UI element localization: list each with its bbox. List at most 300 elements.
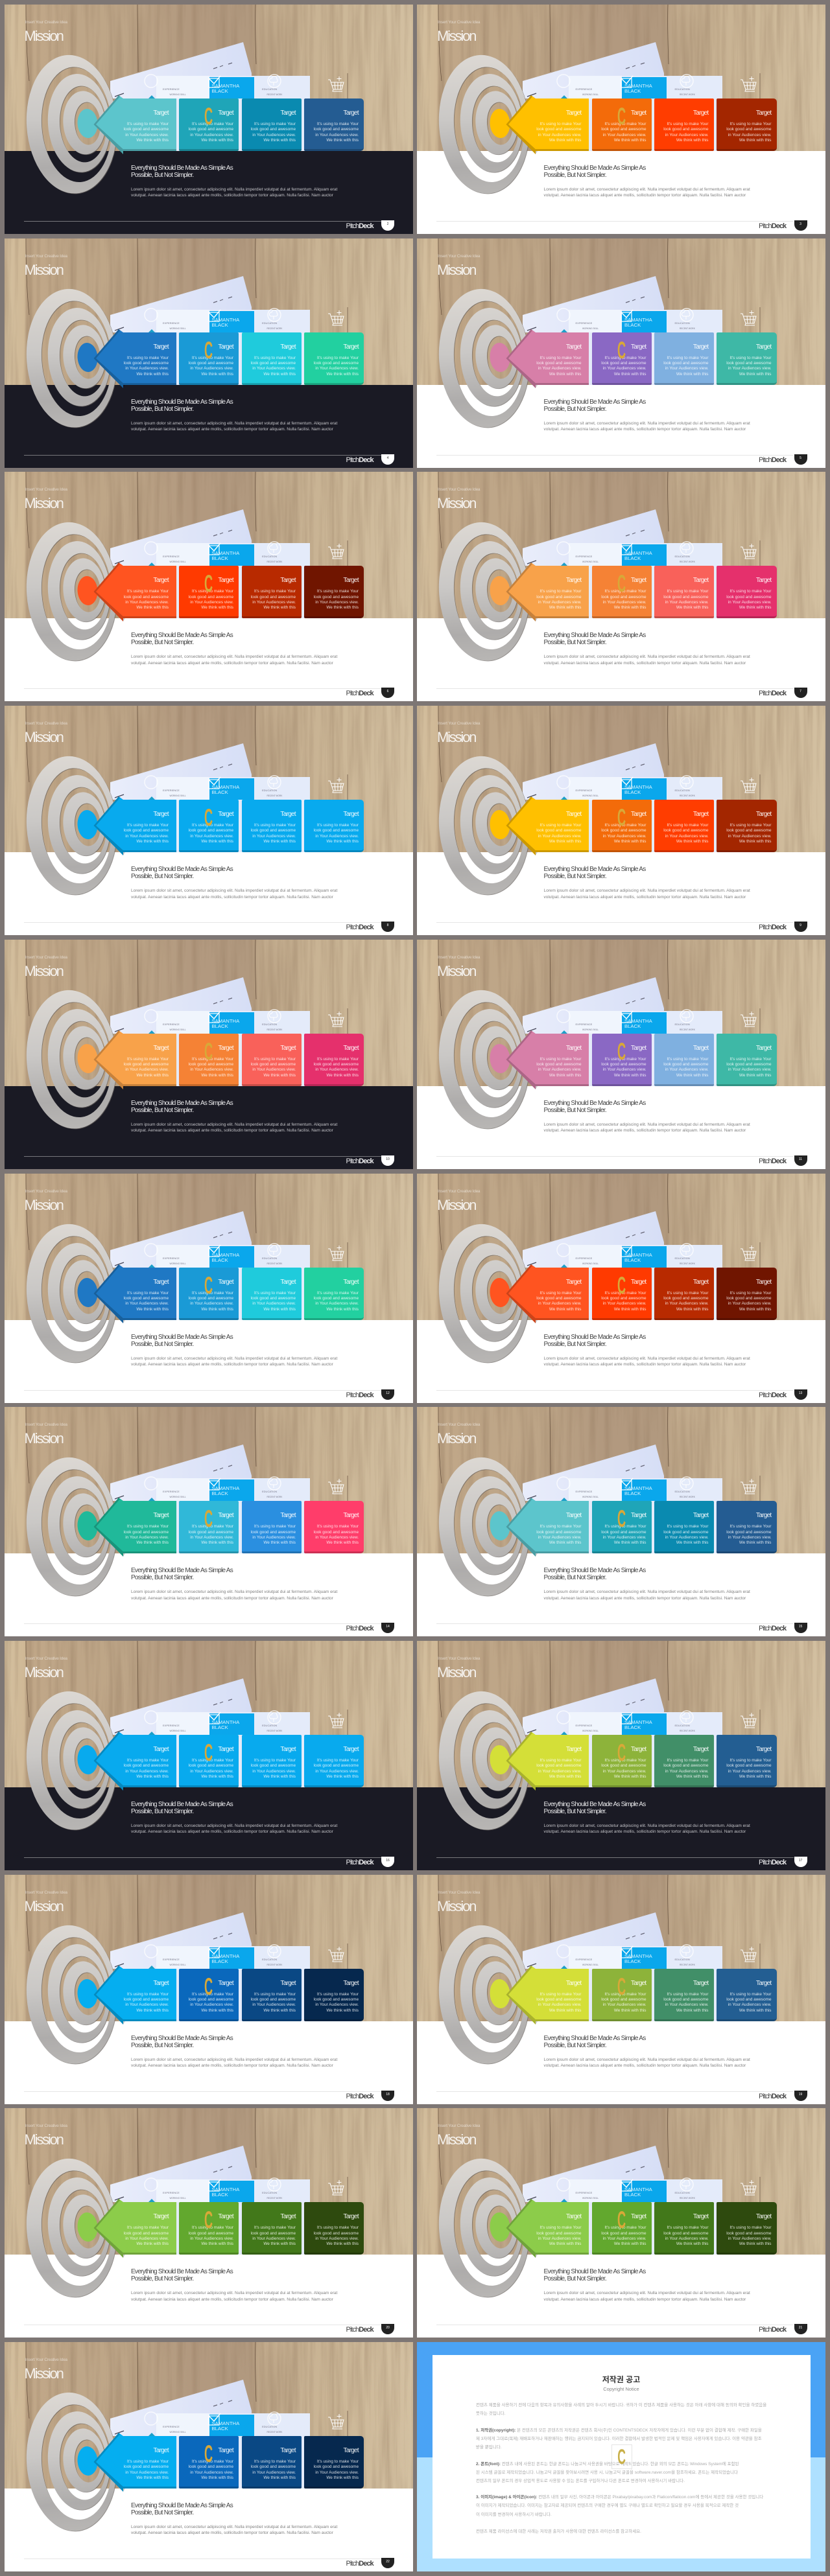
card 1: It's using to make Your	[540, 1992, 581, 1997]
page number	[381, 2324, 394, 2334]
card 4: Target	[756, 1512, 772, 1519]
card 3: It's using to make Your	[254, 1291, 296, 1295]
card 3: look good and awesome	[251, 2465, 296, 2469]
card 2: in Your Audiences view.	[603, 2236, 646, 2241]
title: Mission	[25, 1664, 63, 1680]
resume labels	[163, 550, 283, 563]
heading: Possible, But Not Simpler.	[131, 2042, 193, 2049]
card 2: It's using to make Your	[192, 1758, 233, 1763]
card 4: Target	[343, 343, 359, 351]
card 2	[591, 1268, 651, 1319]
card 4: It's using to make Your	[317, 823, 359, 828]
target rings	[434, 286, 534, 431]
slide 18: navy on white	[4, 1875, 412, 2104]
lower band	[4, 1319, 412, 1402]
card 4	[303, 566, 364, 618]
card 2: Target	[631, 577, 646, 584]
card 3: We think with this	[263, 839, 296, 844]
card 1	[536, 566, 589, 618]
paper sheets	[523, 1678, 722, 1787]
card 4: It's using to make Your	[317, 2459, 359, 2464]
slide 10: peach on dark: BLACK	[211, 1023, 228, 1029]
target rings	[434, 1221, 534, 1366]
card 2: It's using to make Your	[604, 823, 646, 828]
heading	[543, 1100, 645, 1114]
slide 8: cyan on white: EXPERIENCE	[163, 789, 180, 792]
slide 8: cyan on white: BLACK	[211, 789, 228, 795]
card 2	[179, 2436, 239, 2489]
card 2: We think with this	[614, 1307, 646, 1312]
card 3: in Your Audiences view.	[252, 366, 296, 371]
card 3: It's using to make Your	[667, 122, 708, 126]
card 2: look good and awesome	[189, 2465, 233, 2469]
wood background	[4, 1875, 412, 2021]
slide 17: lime on dark: C	[617, 1739, 626, 1766]
slide 21: green on white: EXPERIENCE	[576, 2191, 592, 2194]
card 4: We think with this	[739, 1073, 772, 1078]
card 3: We think with this	[263, 2008, 296, 2013]
artwork	[4, 940, 412, 1169]
wood background	[4, 1407, 412, 1553]
card 1: look good and awesome	[124, 1062, 169, 1067]
card 3: in Your Audiences view.	[665, 1769, 708, 1774]
icon: cart	[328, 778, 344, 793]
card 4: It's using to make Your	[317, 122, 359, 126]
subtitle: Insert Your Creative Idea	[25, 254, 67, 259]
icon: cart	[741, 1713, 756, 1728]
body text	[543, 1356, 750, 1367]
body text: volutpat. Aenean lacinia lacus aliquet ante mollis, sollicitudin tempor tortor aliquam. Nulla facilisi. Nam auctor	[131, 2531, 333, 2535]
heading	[543, 1334, 645, 1348]
card 4: in Your Audiences view.	[315, 1769, 359, 1774]
card 3: in Your Audiences view.	[252, 2470, 296, 2475]
slide 13: red on white: EXPERIENCE	[576, 1256, 592, 1260]
heading: Everything Should Be Made As Simple As	[543, 399, 645, 406]
card 3: We think with this	[676, 372, 708, 377]
body text: Lorem ipsum dolor sit amet, consectetur adipiscing elit. Nulla imperdiet volutpat dui at fermentum. Aliquam erat	[131, 2058, 337, 2062]
resume labels	[417, 2107, 825, 2109]
card 1: It's using to make Your	[540, 356, 581, 360]
page number	[381, 1623, 394, 1633]
lower band	[417, 1319, 825, 1402]
title: Mission	[25, 1196, 63, 1213]
target rings	[21, 1221, 122, 1366]
card 2: It's using to make Your	[604, 356, 646, 360]
slide 21: green on white: WORKING SKILL	[582, 2197, 599, 2199]
notice title: 저작권 공고	[602, 2375, 640, 2384]
page number	[381, 1857, 394, 1867]
card 2: look good and awesome	[189, 1763, 233, 1768]
card 2	[179, 566, 239, 618]
card 2: It's using to make Your	[192, 122, 233, 126]
title: Mission	[437, 1898, 475, 1914]
slide 21: green on white: SAMANTHA	[624, 2187, 652, 2192]
wood background	[417, 940, 825, 1086]
body text: Lorem ipsum dolor sit amet, consectetur adipiscing elit. Nulla imperdiet volutpat dui at fermentum. Aliquam erat	[543, 2058, 750, 2062]
slide 2: teal on dark: EDUCATION	[262, 87, 277, 91]
slide 18: navy on white: SAMANTHA	[211, 1953, 239, 1959]
card 1: in Your Audiences view.	[538, 1301, 581, 1306]
artwork	[5, 5, 413, 234]
artwork	[417, 5, 825, 194]
slide 3: amber on white: EDUCATION	[674, 87, 690, 91]
subtitle: Insert Your Creative Idea	[438, 254, 480, 259]
card 3: in Your Audiences view.	[252, 600, 296, 605]
card 4	[303, 1969, 364, 2021]
heading	[543, 399, 646, 413]
card 2: in Your Audiences view.	[190, 366, 233, 371]
card 3: It's using to make Your	[254, 1057, 296, 1062]
body text: Lorem ipsum dolor sit amet, consectetur adipiscing elit. Nulla imperdiet volutpat dui at fermentum. Aliquam erat	[543, 187, 750, 192]
heading: Possible, But Not Simpler.	[131, 2275, 193, 2282]
card 2: It's using to make Your	[604, 1758, 646, 1763]
card 2	[591, 1735, 651, 1787]
card 4: in Your Audiences view.	[728, 1535, 772, 1540]
card 3: Target	[693, 811, 708, 818]
slide 2: teal on dark: BLACK	[211, 88, 228, 94]
wood background	[417, 5, 825, 151]
body text: Lorem ipsum dolor sit amet, consectetur adipiscing elit. Nulla imperdiet volutpat dui at fermentum. Aliquam erat	[543, 2291, 750, 2295]
brand: PitchDeck	[346, 2326, 374, 2334]
slide 22: navy on white: WORKING SKILL	[170, 2431, 186, 2433]
body text: volutpat. Aenean lacinia lacus aliquet ante mollis, sollicitudin tempor tortor aliquam. Nulla facilisi. Nam auctor	[543, 1829, 746, 1834]
card 4: in Your Audiences view.	[315, 1535, 359, 1540]
card 3: look good and awesome	[251, 828, 296, 833]
subtitle: Insert Your Creative Idea	[25, 1656, 67, 1661]
card 1	[536, 800, 589, 852]
card 2: We think with this	[201, 1307, 233, 1312]
heading	[131, 165, 233, 179]
artwork	[417, 472, 825, 701]
slide 20: green on white: RECENT WORK	[267, 2197, 282, 2199]
target rings	[434, 987, 534, 1132]
subtitle: Insert Your Creative Idea	[25, 721, 67, 726]
body text: Lorem ipsum dolor sit amet, consectetur adipiscing elit. Nulla imperdiet volutpat dui at fermentum. Aliquam erat	[131, 421, 337, 426]
card 2: We think with this	[201, 138, 233, 143]
card 4: look good and awesome	[314, 595, 359, 599]
paper sheets	[110, 509, 310, 618]
target rings	[434, 1922, 534, 2067]
body text: Lorem ipsum dolor sit amet, consectetur adipiscing elit. Nulla imperdiet volutpat dui at fermentum. Aliquam erat	[543, 1122, 750, 1127]
card 1: look good and awesome	[536, 828, 581, 833]
title: Mission	[437, 963, 475, 979]
card 4: We think with this	[739, 372, 772, 377]
icon: cart	[741, 778, 756, 793]
card 1: We think with this	[136, 2476, 169, 2480]
card 1: Target	[153, 343, 169, 351]
card 2: in Your Audiences view.	[603, 834, 646, 839]
body text: Lorem ipsum dolor sit amet, consectetur adipiscing elit. Nulla imperdiet volutpat dui at fermentum. Aliquam erat	[543, 1590, 750, 1594]
card 2: Target	[218, 1512, 233, 1519]
body text: Lorem ipsum dolor sit amet, consectetur adipiscing elit. Nulla imperdiet volutpat dui at fermentum. Aliquam erat	[543, 655, 750, 659]
brand: PitchDeck	[346, 1391, 374, 1398]
page number: 20	[386, 2326, 390, 2330]
slide 9: amber on white: BLACK	[624, 789, 641, 795]
card 3: It's using to make Your	[667, 589, 708, 594]
body text: volutpat. Aenean lacinia lacus aliquet ante mollis, sollicitudin tempor tortor aliquam. Nulla facilisi. Nam auctor	[543, 1596, 746, 1601]
card 3: It's using to make Your	[254, 2459, 296, 2464]
brand: PitchDeck	[759, 456, 786, 464]
arrow head	[506, 796, 540, 855]
slide 3: amber on white	[417, 5, 825, 234]
card 4	[717, 566, 777, 618]
heading	[543, 2035, 645, 2049]
card 3: It's using to make Your	[667, 1057, 708, 1062]
card 3: It's using to make Your	[254, 1758, 296, 1763]
card 1: Target	[566, 2213, 581, 2220]
title: Mission	[25, 963, 63, 979]
body text	[131, 1122, 337, 1134]
card 2	[179, 1969, 239, 2021]
slide 5: rose on white: WORKING SKILL	[582, 327, 599, 330]
target rings	[21, 1922, 122, 2067]
page number: 11	[799, 1157, 802, 1161]
slide 5: rose on white	[417, 238, 825, 468]
card 1: It's using to make Your	[540, 1524, 581, 1529]
slide 13: red on white: WORKING SKILL	[582, 1262, 599, 1265]
card 1: in Your Audiences view.	[125, 133, 169, 137]
card 3: in Your Audiences view.	[665, 834, 708, 839]
heading: Possible, But Not Simpler.	[131, 1107, 193, 1114]
card 1: look good and awesome	[536, 1062, 581, 1067]
card 2: look good and awesome	[189, 1296, 233, 1301]
card 3: We think with this	[263, 1540, 296, 1545]
page number: 13	[799, 1391, 802, 1395]
icon: cart	[741, 2180, 756, 2195]
card 4: in Your Audiences view.	[315, 2236, 359, 2241]
page number: 21	[799, 2326, 802, 2330]
slide 6: red on white: RECENT WORK	[267, 561, 282, 563]
card 2: It's using to make Your	[604, 122, 646, 126]
card 4: in Your Audiences view.	[728, 1067, 772, 1072]
slide 22: navy on white: BLACK	[211, 2426, 228, 2431]
card 3: in Your Audiences view.	[252, 133, 296, 137]
body text: volutpat. Aenean lacinia lacus aliquet ante mollis, sollicitudin tempor tortor aliquam. Nulla facilisi. Nam auctor	[543, 894, 746, 899]
card 4: in Your Audiences view.	[728, 2002, 772, 2007]
slide 15: teal on white: RECENT WORK	[680, 1496, 695, 1498]
card 2: We think with this	[614, 372, 646, 377]
slide 14: mint on white: EXPERIENCE	[163, 1490, 180, 1493]
card 4: in Your Audiences view.	[728, 1769, 772, 1774]
card 1: look good and awesome	[124, 2231, 169, 2236]
card 2: in Your Audiences view.	[603, 1769, 646, 1774]
card 4: We think with this	[326, 1540, 359, 1545]
brand: PitchDeck	[346, 456, 374, 464]
heading	[131, 2268, 233, 2282]
slide 15: teal on white: C	[617, 1505, 626, 1532]
slide 4: blue on dark: RECENT WORK	[267, 327, 282, 330]
card 4: look good and awesome	[726, 828, 772, 833]
slide 10: peach on dark	[4, 940, 412, 1169]
wood background	[417, 2108, 825, 2255]
card 3: look good and awesome	[663, 1997, 708, 2002]
card 3: We think with this	[263, 605, 296, 610]
body text: volutpat. Aenean lacinia lacus aliquet ante mollis, sollicitudin tempor tortor aliquam. Nulla facilisi. Nam auctor	[131, 1829, 333, 1834]
slide 8: cyan on white: RECENT WORK	[267, 795, 282, 797]
body text: Lorem ipsum dolor sit amet, consectetur adipiscing elit. Nulla imperdiet volutpat dui at fermentum. Aliquam erat	[543, 421, 750, 426]
paper sheets	[110, 2146, 310, 2255]
card 2: Target	[631, 1980, 646, 1987]
card 3	[654, 566, 714, 618]
card 4: in Your Audiences view.	[728, 133, 772, 137]
wood background	[417, 1173, 825, 1319]
card 2: It's using to make Your	[192, 1524, 233, 1529]
heading: Possible, But Not Simpler.	[543, 873, 606, 880]
arrow head	[506, 95, 540, 154]
card 4: look good and awesome	[314, 1296, 359, 1301]
slide 20: green on white: EXPERIENCE	[163, 2191, 180, 2194]
slide 8: cyan on white	[4, 706, 412, 935]
card 3: in Your Audiences view.	[252, 1301, 296, 1306]
card 1	[123, 1735, 176, 1787]
card 2: look good and awesome	[601, 361, 646, 366]
wood background	[4, 238, 412, 385]
card 3: look good and awesome	[663, 595, 708, 599]
heading: Everything Should Be Made As Simple As	[131, 1567, 233, 1574]
card 3: look good and awesome	[663, 2231, 708, 2236]
resume labels	[4, 705, 412, 706]
slide 10: peach on dark: WORKING SKILL	[170, 1028, 186, 1031]
title: Mission	[25, 28, 63, 44]
lower band	[417, 385, 825, 468]
heading: Everything Should Be Made As Simple As	[131, 1100, 233, 1107]
card 2: Target	[218, 2447, 233, 2454]
body text	[543, 888, 750, 900]
artwork	[4, 1173, 412, 1402]
card 1: Target	[153, 577, 169, 584]
slide 7: peach on white: EXPERIENCE	[576, 555, 592, 558]
slide 18: navy on white: RECENT WORK	[267, 1964, 282, 1966]
slide 9: amber on white: RECENT WORK	[680, 795, 695, 797]
card 3: We think with this	[676, 1774, 708, 1779]
card 3: look good and awesome	[663, 1763, 708, 1768]
slide 12: blue on white: EXPERIENCE	[163, 1256, 180, 1260]
card 4: It's using to make Your	[317, 1057, 359, 1062]
card 1: Target	[153, 1045, 169, 1052]
slide 14: mint on white: EDUCATION	[262, 1490, 277, 1493]
body text: volutpat. Aenean lacinia lacus aliquet ante mollis, sollicitudin tempor tortor aliquam. Nulla facilisi. Nam auctor	[131, 661, 333, 666]
card 1: look good and awesome	[536, 2231, 581, 2236]
heading: Possible, But Not Simpler.	[543, 639, 606, 646]
slide 13: red on white: BLACK	[624, 1257, 641, 1262]
card 4: look good and awesome	[726, 1530, 772, 1535]
card 1: We think with this	[549, 1307, 581, 1312]
lower band	[4, 1553, 412, 1636]
card 3	[654, 800, 714, 852]
card 3: Target	[693, 1278, 708, 1286]
card 2	[591, 1501, 651, 1553]
card 1: We think with this	[136, 605, 169, 610]
card 2	[179, 1034, 239, 1086]
card 4: Target	[343, 2447, 359, 2454]
subtitle: Insert Your Creative Idea	[25, 487, 67, 492]
arrow head	[506, 1264, 540, 1323]
artwork	[417, 1875, 825, 2104]
card 1: It's using to make Your	[127, 1291, 169, 1295]
slide 8: cyan on white: EDUCATION	[262, 789, 277, 792]
card 4: look good and awesome	[314, 1530, 359, 1535]
slide 22: navy on white: C	[204, 2441, 213, 2467]
card 4: It's using to make Your	[729, 1992, 772, 1997]
card 2: It's using to make Your	[192, 2459, 233, 2464]
card 1: in Your Audiences view.	[538, 1769, 581, 1774]
card 2	[591, 2202, 651, 2255]
card 2: It's using to make Your	[192, 823, 233, 828]
card 1: in Your Audiences view.	[125, 600, 169, 605]
card 4: Target	[343, 1746, 359, 1753]
card 3: Target	[693, 1045, 708, 1052]
card 4	[717, 99, 777, 151]
page number	[381, 922, 394, 932]
card 2: look good and awesome	[189, 361, 233, 366]
card 2: It's using to make Your	[604, 2225, 646, 2230]
slide 8: cyan on white: SAMANTHA	[211, 784, 239, 790]
resume labels	[4, 939, 412, 940]
arrow head	[93, 1966, 127, 2025]
card 3	[654, 1034, 714, 1086]
card 2: in Your Audiences view.	[190, 2236, 233, 2241]
slide 13: red on white: RECENT WORK	[680, 1262, 695, 1265]
page number	[794, 220, 807, 231]
paper sheets	[110, 1678, 310, 1787]
card 4: We think with this	[326, 1774, 359, 1779]
slide 13: red on white: SAMANTHA	[624, 1252, 652, 1257]
page number: 7	[800, 690, 801, 693]
slide 6: red on white: SAMANTHA	[211, 550, 239, 556]
brand: PitchDeck	[346, 1157, 374, 1165]
title: Mission	[437, 1664, 475, 1680]
slide 16: cyan on dark: C	[204, 1739, 213, 1766]
card 3: look good and awesome	[663, 1062, 708, 1067]
card 4: in Your Audiences view.	[315, 2470, 359, 2475]
card 2: We think with this	[614, 839, 646, 844]
subtitle: Insert Your Creative Idea	[438, 1656, 480, 1661]
card 3	[241, 2436, 301, 2489]
slide 9: amber on white: C	[617, 804, 626, 831]
card 3: We think with this	[676, 1540, 708, 1545]
slide 13: red on white: EDUCATION	[674, 1256, 690, 1260]
card 1: Target	[153, 1278, 169, 1286]
heading: Possible, But Not Simpler.	[543, 1808, 606, 1815]
slide 5: rose on white: C	[617, 337, 626, 364]
logo mark	[611, 2444, 632, 2469]
heading	[131, 1567, 233, 1581]
title: Mission	[25, 495, 63, 511]
arrow head	[506, 1030, 540, 1089]
heading	[131, 866, 233, 880]
slide 5: rose on white: SAMANTHA	[624, 317, 652, 323]
subtitle: Insert Your Creative Idea	[25, 2358, 67, 2362]
card 1	[536, 1034, 589, 1086]
card 2: We think with this	[614, 1073, 646, 1078]
brand: PitchDeck	[346, 1625, 374, 1632]
slide 22: navy on white: SAMANTHA	[211, 2420, 239, 2426]
card 1: We think with this	[136, 372, 169, 377]
heading	[543, 165, 646, 179]
resume labels	[417, 1173, 825, 1174]
heading: Everything Should Be Made As Simple As	[131, 2035, 233, 2042]
card 2: It's using to make Your	[192, 2225, 233, 2230]
target rings	[21, 286, 122, 431]
heading: Everything Should Be Made As Simple As	[131, 632, 233, 639]
card 1: We think with this	[549, 839, 581, 844]
heading: Possible, But Not Simpler.	[131, 873, 193, 880]
card 3: It's using to make Your	[667, 1992, 708, 1997]
page number: 18	[386, 2093, 390, 2096]
card 3: It's using to make Your	[667, 823, 708, 828]
card 3: look good and awesome	[251, 1763, 296, 1768]
resume labels	[163, 83, 283, 96]
